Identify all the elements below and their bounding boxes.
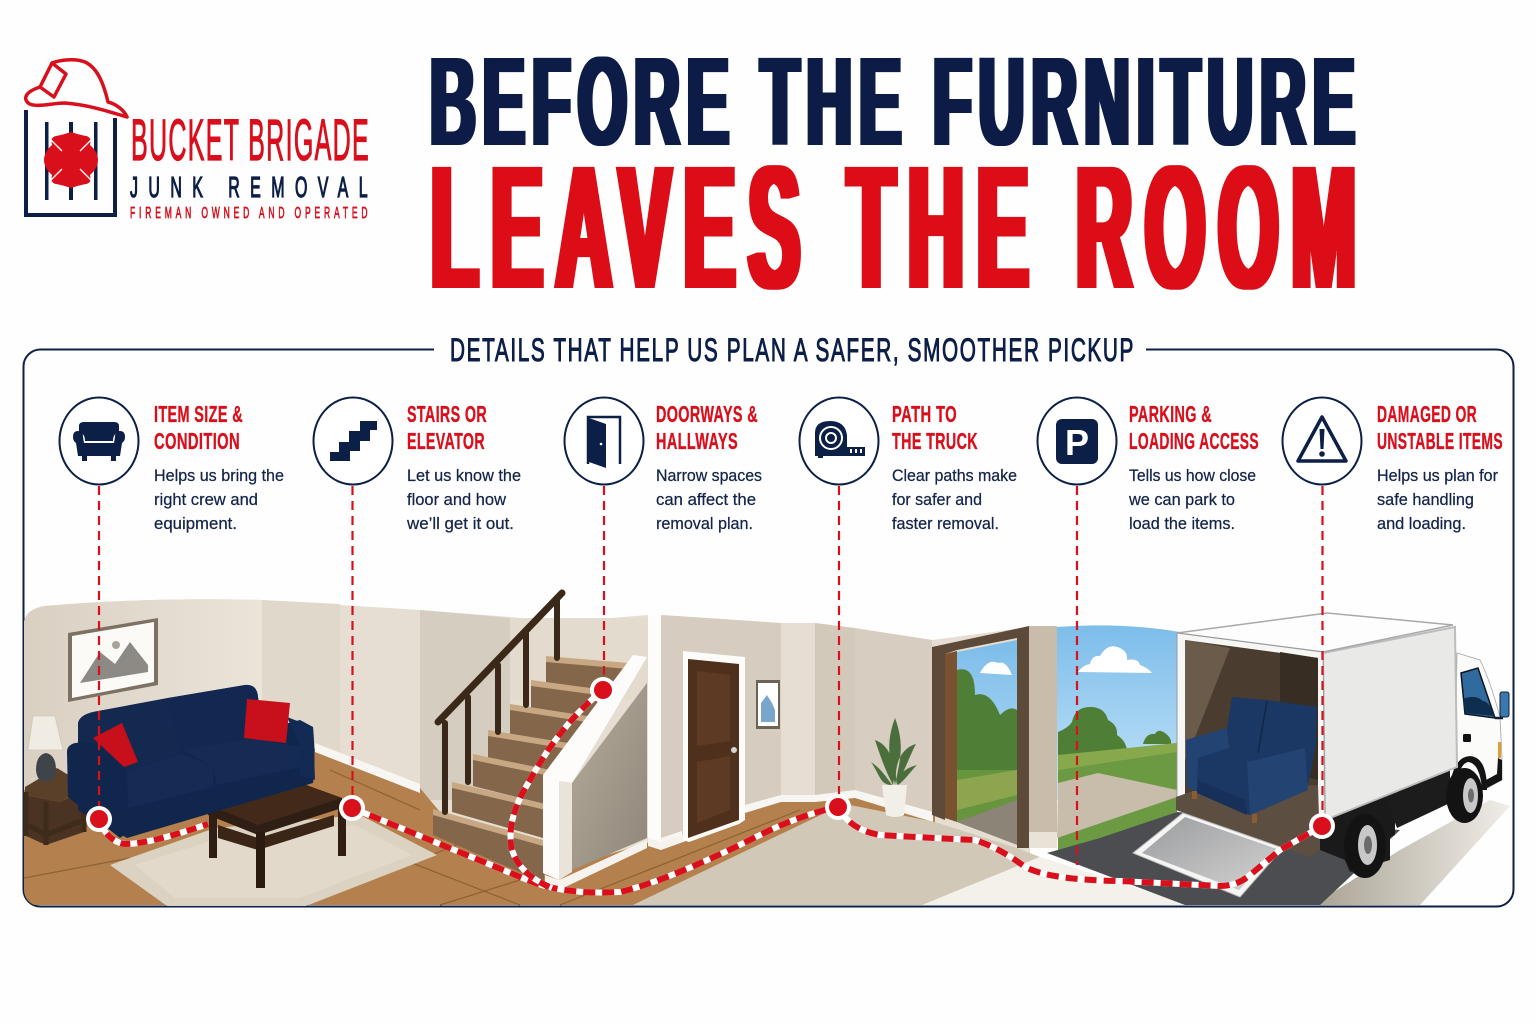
doorway — [932, 626, 1029, 848]
description: load the items. — [1129, 514, 1235, 533]
cargo side — [1323, 627, 1457, 820]
description — [656, 466, 762, 533]
panel heading: DETAILS THAT HELP US PLAN A SAFER, SMOOTHER PICKUP — [450, 332, 1135, 368]
description — [1377, 466, 1498, 533]
side table — [25, 768, 88, 845]
description: floor and how — [407, 490, 507, 509]
description — [154, 466, 284, 533]
description: right crew and — [154, 490, 258, 509]
step: damaged or unstable items — [1282, 398, 1503, 533]
heading — [892, 401, 978, 454]
text: BUCKET BRIGADE — [131, 108, 370, 173]
baseboards — [315, 743, 933, 848]
wall art — [68, 618, 158, 702]
icon: warning triangle — [1282, 398, 1362, 484]
description: Clear paths make — [892, 466, 1017, 485]
description — [406, 466, 521, 533]
heading: DOORWAYS & — [656, 401, 758, 427]
cargo rear frame — [1177, 633, 1325, 820]
heading — [1129, 401, 1259, 454]
pavement — [1313, 800, 1510, 905]
description: we’ll get it out. — [406, 514, 514, 533]
path — [1057, 773, 1177, 838]
heading — [154, 401, 243, 454]
icon: parking sign — [1038, 398, 1116, 484]
floor: entry — [922, 857, 1190, 905]
description: equipment. — [154, 514, 237, 533]
description: safe handling — [1377, 490, 1474, 509]
heading: ITEM SIZE & — [154, 401, 243, 427]
description: Tells us how close — [1129, 466, 1256, 485]
truck chassis — [1320, 770, 1450, 860]
step: parking and loading access — [1038, 398, 1259, 533]
description: for safer and — [892, 490, 982, 509]
heading: STAIRS OR — [407, 401, 487, 427]
plant — [871, 718, 917, 817]
icon: door — [564, 398, 644, 484]
logo tagline: FIREMAN OWNED AND OPERATED — [130, 204, 368, 222]
title — [430, 31, 1369, 326]
step: stairs or elevator — [314, 398, 521, 533]
icon: tape measure — [800, 398, 878, 484]
asphalt — [1047, 812, 1400, 905]
rear wheel — [1345, 825, 1390, 878]
description: Helps us plan for — [1377, 466, 1498, 485]
truck deck — [1176, 785, 1320, 857]
description — [892, 466, 1017, 533]
floor: carpet — [633, 805, 1040, 905]
icon: armchair — [60, 398, 138, 484]
walls — [24, 599, 1030, 860]
ramp — [1133, 813, 1283, 897]
stair railing — [438, 593, 562, 812]
concrete pillar — [1029, 626, 1057, 848]
heading — [1377, 401, 1503, 454]
heading: THE TRUCK — [892, 428, 978, 454]
outdoor view — [1057, 625, 1180, 855]
half wall — [572, 683, 647, 870]
icon: bucket bars — [45, 122, 98, 200]
description: removal plan. — [656, 514, 753, 533]
scene illustration — [24, 593, 1510, 906]
step: item size and condition — [60, 398, 284, 533]
panel: details frame — [24, 350, 1514, 906]
description: can affect the — [656, 490, 756, 509]
trees — [1058, 707, 1171, 755]
description: Let us know the — [407, 466, 521, 485]
heading — [656, 401, 758, 454]
icon: maltese cross — [44, 132, 98, 188]
step: path to the truck — [800, 398, 1017, 533]
floor: wood — [24, 748, 935, 905]
wall picture — [756, 680, 780, 729]
icon: stairs — [314, 398, 392, 484]
heading: CONDITION — [154, 428, 240, 454]
grass — [1058, 743, 1177, 855]
coffee table — [208, 781, 346, 888]
heading: ELEVATOR — [407, 428, 485, 454]
lamp — [28, 716, 63, 782]
logo subtitle: JUNK REMOVAL — [130, 171, 368, 203]
logo — [26, 60, 370, 222]
heading — [407, 401, 487, 454]
sofa — [67, 685, 315, 838]
icon: bucket outline — [26, 110, 115, 215]
pilaster — [648, 615, 661, 847]
heading: PATH TO — [892, 401, 957, 427]
truck — [1133, 613, 1509, 897]
step: doorways and hallways — [564, 398, 762, 533]
heading: LOADING ACCESS — [1129, 428, 1259, 454]
icon: parking sign: P — [1065, 422, 1089, 463]
description: we can park to — [1128, 490, 1235, 509]
staircase — [433, 593, 686, 890]
cargo interior — [1185, 640, 1318, 800]
icon: fire helmet — [26, 60, 127, 117]
description: and loading. — [1377, 514, 1466, 533]
door — [683, 651, 745, 842]
description: Narrow spaces — [656, 466, 762, 485]
rug — [110, 815, 437, 906]
armchair — [1186, 697, 1317, 823]
description: faster removal. — [892, 514, 999, 533]
front wheel — [1446, 768, 1483, 823]
connector lines — [99, 486, 1322, 865]
description — [1128, 466, 1256, 533]
route stops — [86, 677, 1335, 839]
description: Helps us bring the — [154, 466, 284, 485]
heading: PARKING & — [1129, 401, 1212, 427]
route path — [98, 690, 1322, 893]
cloud — [1078, 646, 1152, 673]
truck cab — [1452, 652, 1510, 790]
cargo roof — [1177, 613, 1453, 652]
heading: HALLWAYS — [656, 428, 738, 454]
